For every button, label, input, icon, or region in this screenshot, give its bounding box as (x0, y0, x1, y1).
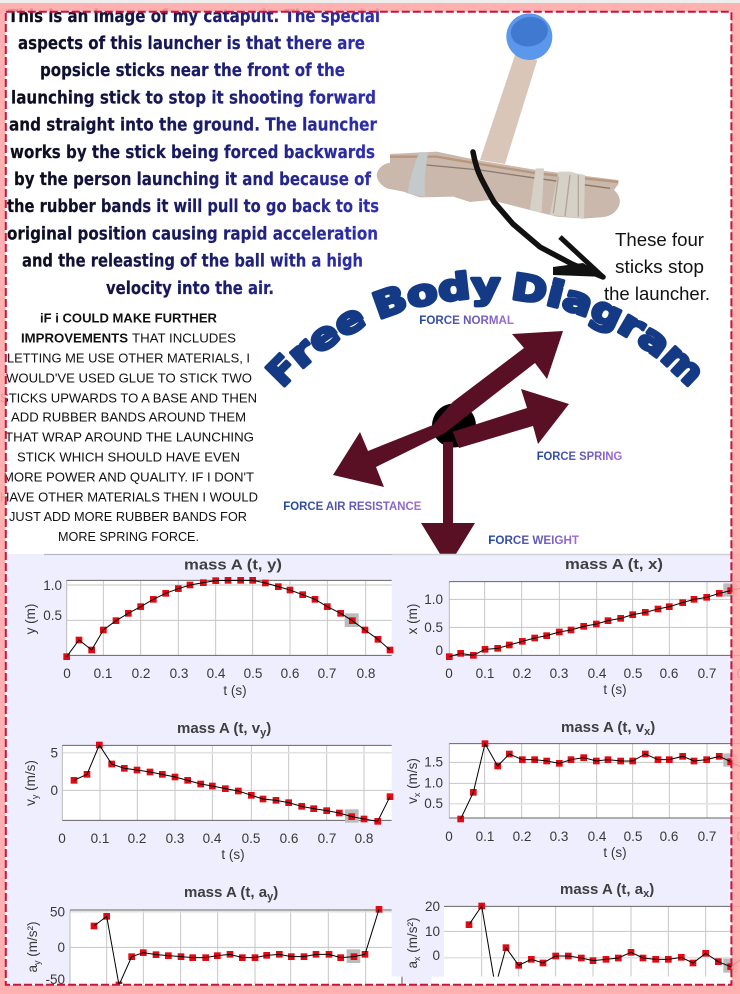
arrow: force air resistance (333, 425, 445, 487)
launching stick (480, 55, 537, 164)
arrow: force weight (421, 442, 475, 554)
axis labels (407, 902, 440, 968)
axis labels: 0.3 (550, 666, 568, 681)
right rubber bands (530, 168, 585, 218)
axis labels: 0 (58, 831, 66, 846)
axis labels: 0.7 (318, 666, 336, 681)
axis labels: 0.6 (280, 831, 298, 846)
text block: further improvements: HAVE OTHER MATERIALS THEN I WOULD (0, 489, 258, 504)
axis labels: 0.7 (698, 666, 716, 681)
label: force air resistance: FORCE AIR RESISTANCE (283, 499, 421, 513)
axis labels: -50 (45, 972, 65, 987)
chart: mass A (t, ax) (390, 881, 740, 987)
heading: Free Body Diagram: i (543, 272, 569, 317)
axis labels (23, 578, 375, 698)
chart: mass A (t, y): mass A (t, y) (184, 556, 282, 573)
callout: these four sticks (604, 230, 710, 304)
axis labels: 5 (50, 746, 58, 761)
axis labels: 1.0 (43, 578, 62, 593)
arrow: hand drawn pointer to stopper sticks (473, 152, 606, 277)
axis labels: 50 (50, 905, 65, 920)
chart: mass A (t, ay): y (267, 891, 274, 903)
text block: catapult description: and straight into the ground. The launcher (9, 116, 377, 136)
axis labels: 0.3 (550, 829, 568, 844)
plot: acceleration x (390, 906, 740, 987)
chart: mass A (t, vx): x (644, 726, 651, 738)
chart: mass A (t, y) (23, 556, 392, 698)
axis labels: 0 (445, 829, 453, 844)
text block: further improvements: WOULD'VE USED GLUE TO STICK TWO (6, 370, 252, 385)
heading: Free Body Diagram: r (611, 301, 653, 350)
chart: mass A (t, vx) (405, 719, 740, 860)
axis labels: 1.5 (424, 755, 443, 770)
text block: catapult description (7, 7, 380, 299)
chart: mass A (t, vx): ) (650, 719, 655, 736)
chart: mass A (t, vy): mass A (t, v (177, 720, 260, 737)
label: force weight: FORCE WEIGHT (488, 533, 580, 547)
callout: these four sticks: sticks stop (615, 257, 704, 277)
axis labels (23, 746, 373, 862)
heading: Free Body Diagram: y (471, 265, 500, 307)
axis labels: 0.7 (318, 831, 336, 846)
text block: further improvements: ADD RUBBER BANDS AROUND THEM (11, 410, 246, 425)
label: force spring: FORCE SPRING (537, 449, 622, 463)
axis labels: 0.6 (281, 666, 299, 681)
axis labels: 1.0 (424, 592, 443, 607)
text block: catapult description: original position causing rapid acceleration (7, 224, 378, 244)
axis labels: 0 (63, 666, 71, 681)
axis labels: 0 (445, 666, 453, 681)
text block: further improvements: IMPROVEMENTS (21, 331, 128, 346)
axis labels: 0.2 (132, 666, 150, 681)
chart: mass A (t, x): mass A (t, x) (565, 556, 663, 573)
axis labels: x (412, 792, 422, 797)
left rubber bands (407, 152, 428, 197)
axis labels (405, 592, 740, 697)
diagram: free body arrows (333, 331, 569, 567)
chart: mass A (t, vy) (23, 720, 392, 862)
axis labels: x (m) (405, 604, 420, 634)
callout: these four sticks: the launcher. (604, 284, 710, 304)
axis labels: 0.6 (660, 829, 678, 844)
text block: catapult description: This is an image of my catapult. The special (8, 7, 380, 27)
plot: velocity x (449, 743, 740, 819)
axis labels: (m/s) (405, 758, 420, 793)
axis labels: 0.4 (588, 666, 607, 681)
chart: mass A (t, x) (405, 556, 740, 697)
plot: position y (67, 580, 392, 657)
axis labels: 0.1 (476, 829, 494, 844)
arrow: force spring (453, 389, 569, 448)
axis labels: 0.5 (424, 796, 443, 811)
text block: catapult description: velocity into the air. (106, 279, 274, 299)
bottle cap inside (508, 14, 550, 49)
heading: Free Body Diagram: o (402, 269, 441, 317)
chart: mass A (t, vx): mass A (t, v (561, 719, 644, 736)
heading: Free Body Diagram: m (653, 336, 712, 395)
axis labels (27, 907, 64, 984)
axis labels: t (s) (223, 683, 247, 698)
axis labels: 0.5 (43, 608, 62, 623)
label: force normal: FORCE NORMAL (419, 313, 514, 327)
text block: catapult description: aspects of this launcher is that there are (18, 34, 365, 54)
chart: mass A (t, vy): y (260, 727, 267, 739)
text block: further improvements: MORE POWER AND QUALITY. IF I DON'T (3, 469, 254, 484)
axis labels: 0.3 (166, 831, 184, 846)
chart: mass A (t, ax): ) (649, 881, 654, 898)
axis labels (405, 755, 740, 860)
body circle (432, 404, 476, 448)
chart: mass A (t, ax): x (643, 888, 650, 900)
text block: catapult description: and the releasting of the ball with a high (22, 252, 363, 272)
axis labels: (m/s²) (25, 922, 40, 960)
plot: acceleration y (70, 909, 403, 987)
axis labels: (m/s) (23, 760, 38, 795)
axis labels: y (30, 794, 40, 799)
axis labels: v (23, 799, 38, 806)
axis labels: 0.2 (513, 666, 531, 681)
text block: further improvements: STICK WHICH SHOULD HAVE EVEN (17, 450, 240, 464)
axis labels: 0.4 (588, 829, 607, 844)
text block: further improvements (0, 311, 258, 544)
chart: mass A (t, ax): mass A (t, a (560, 881, 643, 898)
heading: Free Body Diagram: e (327, 296, 372, 346)
axis labels: 0.7 (698, 829, 716, 844)
heading: Free Body Diagram: g (584, 287, 629, 338)
text block: further improvements: MORE SPRING FORCE. (58, 529, 199, 544)
axis labels: 0.2 (513, 829, 531, 844)
axis labels: x (412, 956, 422, 961)
top stick layers (390, 157, 618, 182)
chart: mass A (t, vy): ) (266, 720, 271, 737)
plot: velocity y (62, 745, 392, 823)
text block: catapult description: works by the stick being forced backwards (10, 143, 375, 163)
axis labels: v (405, 797, 420, 804)
text block: catapult description: the rubber bands it will pull to go back to its (7, 197, 379, 217)
heading: Free Body Diagram: a (558, 277, 598, 326)
axis labels: 0.8 (357, 666, 375, 681)
axis labels: 0.4 (203, 831, 222, 846)
heading: Free Body Diagram: r (279, 329, 324, 376)
heading: Free Body Diagram: d (436, 264, 472, 310)
axis labels: 0.3 (170, 666, 188, 681)
axis labels: 10 (425, 924, 440, 939)
axis labels: y (32, 960, 42, 965)
axis labels: t (s) (603, 682, 627, 697)
axis labels: y (m) (23, 604, 38, 634)
axis labels: 0.2 (128, 831, 146, 846)
axis labels: 0.5 (424, 620, 443, 635)
axis labels: 0.5 (242, 831, 260, 846)
axis labels: a (405, 961, 420, 968)
arrow: force normal (433, 331, 563, 433)
axis labels: a (25, 965, 40, 972)
heading: Free Body Diagram: D (509, 267, 550, 313)
text block: further improvements: LETTING ME USE OTHER MATERIALS, I (7, 350, 250, 366)
plot: position x (449, 581, 740, 657)
axis labels: 0 (432, 948, 440, 963)
text block: catapult description: by the person launching it and because of (14, 170, 371, 190)
axis labels: 0 (435, 643, 443, 658)
axis labels: 0.1 (91, 831, 109, 846)
text block: further improvements: iF i COULD MAKE FURTHER (40, 311, 218, 326)
panel: motion graphs (7, 554, 740, 987)
axis labels: 0 (50, 783, 58, 798)
text block: further improvements: THAT WRAP AROUND THE LAUNCHING (5, 430, 254, 445)
image: popsicle stick catapult (377, 10, 620, 219)
axis labels: 0.5 (624, 829, 642, 844)
axis labels: 0.4 (207, 666, 226, 681)
text block: further improvements: THAT INCLUDES (132, 331, 236, 346)
bottle cap (503, 10, 556, 64)
heading: Free Body Diagram: B (368, 278, 413, 328)
text block: further improvements: JUST ADD MORE RUBBER BANDS FOR (9, 509, 247, 524)
axis labels: (m/s²) (405, 918, 420, 956)
heading: Free Body Diagram (259, 264, 712, 395)
axis labels: 0.5 (624, 666, 642, 681)
axis labels: 1.0 (424, 776, 443, 791)
axis labels: 0.1 (476, 666, 494, 681)
axis labels: 0.6 (660, 666, 678, 681)
axis labels: 0.1 (94, 666, 112, 681)
callout: these four sticks: These four (615, 230, 704, 250)
text block: catapult description: popsicle sticks near the front of the (40, 61, 345, 81)
axis labels: t (s) (603, 845, 627, 860)
axis labels: t (s) (221, 847, 245, 862)
text block: catapult description: launching stick to stop it shooting forward (11, 88, 376, 108)
heading: Free Body Diagram: F (259, 347, 307, 395)
heading: Free Body Diagram: e (300, 311, 347, 362)
chart: mass A (t, ay): ) (273, 884, 278, 901)
axis labels: 0.8 (355, 831, 373, 846)
chart: mass A (t, ay) (25, 884, 403, 987)
heading: Free Body Diagram: a (630, 316, 678, 366)
axis labels: 20 (425, 899, 440, 914)
axis labels: 0 (57, 940, 65, 955)
chart: mass A (t, ay): mass A (t, a (184, 884, 267, 901)
text block: further improvements: STICKS UPWARDS TO A BASE AND THEN (0, 390, 257, 405)
catapult base (377, 152, 620, 219)
axis labels: 0.5 (244, 666, 262, 681)
